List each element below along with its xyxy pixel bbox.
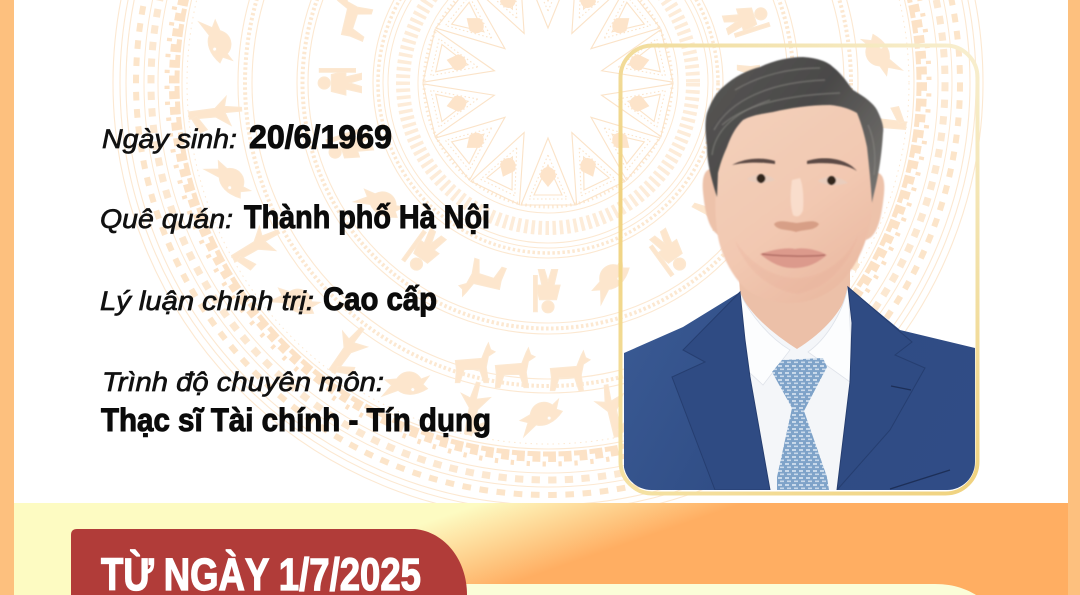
pale content box: [440, 584, 976, 595]
shirt collar: [740, 287, 851, 385]
white shirt: [744, 300, 852, 490]
ears: [703, 169, 884, 240]
inner figures band: [318, 0, 777, 313]
field: date of birth: Ngày sinh:: [102, 124, 237, 154]
field: professional qualification: Trình độ chuyên môn:: [102, 367, 384, 397]
field: hometown: Thành phố Hà Nội: [244, 199, 490, 235]
field: hometown: [100, 199, 490, 235]
bronze drum watermark: [113, 0, 983, 518]
nose: [774, 178, 819, 232]
outer drum rings: [113, 0, 983, 518]
field: date of birth: 20/6/1969: [249, 119, 392, 155]
ring band with dotted circles: [238, 0, 858, 393]
central star triangles: [423, 0, 673, 205]
neck: [739, 270, 850, 349]
lower animal band: [455, 343, 590, 391]
field: political theory: [100, 281, 437, 317]
field: hometown: Quê quán:: [100, 204, 233, 234]
field: date of birth: [102, 119, 392, 155]
flying birds band: [188, 0, 908, 440]
field: professional qualification: [101, 367, 491, 438]
eyes: [747, 174, 848, 185]
necktie: [772, 358, 829, 490]
bottom gradient panel: [14, 503, 1068, 595]
mouth: [760, 248, 827, 268]
portrait photo: [624, 57, 975, 490]
suit jacket: [624, 287, 975, 490]
hair highlights: [712, 68, 875, 175]
hair: [706, 57, 883, 203]
field: professional qualification: Thạc sĩ Tài chính - Tín dụng: [101, 402, 491, 438]
eyebrows: [732, 158, 857, 171]
right border: [1068, 0, 1080, 595]
face: [716, 104, 870, 283]
left border: [0, 0, 14, 595]
field: political theory: Lý luận chính trị:: [100, 286, 314, 316]
lapel buttonhole and pocket: [890, 386, 950, 489]
gold photo frame: [620, 46, 978, 494]
jacket lapels: [672, 287, 925, 490]
cheek shading: [735, 235, 858, 294]
field: political theory: Cao cấp: [323, 281, 437, 317]
red date tab: [71, 529, 467, 595]
